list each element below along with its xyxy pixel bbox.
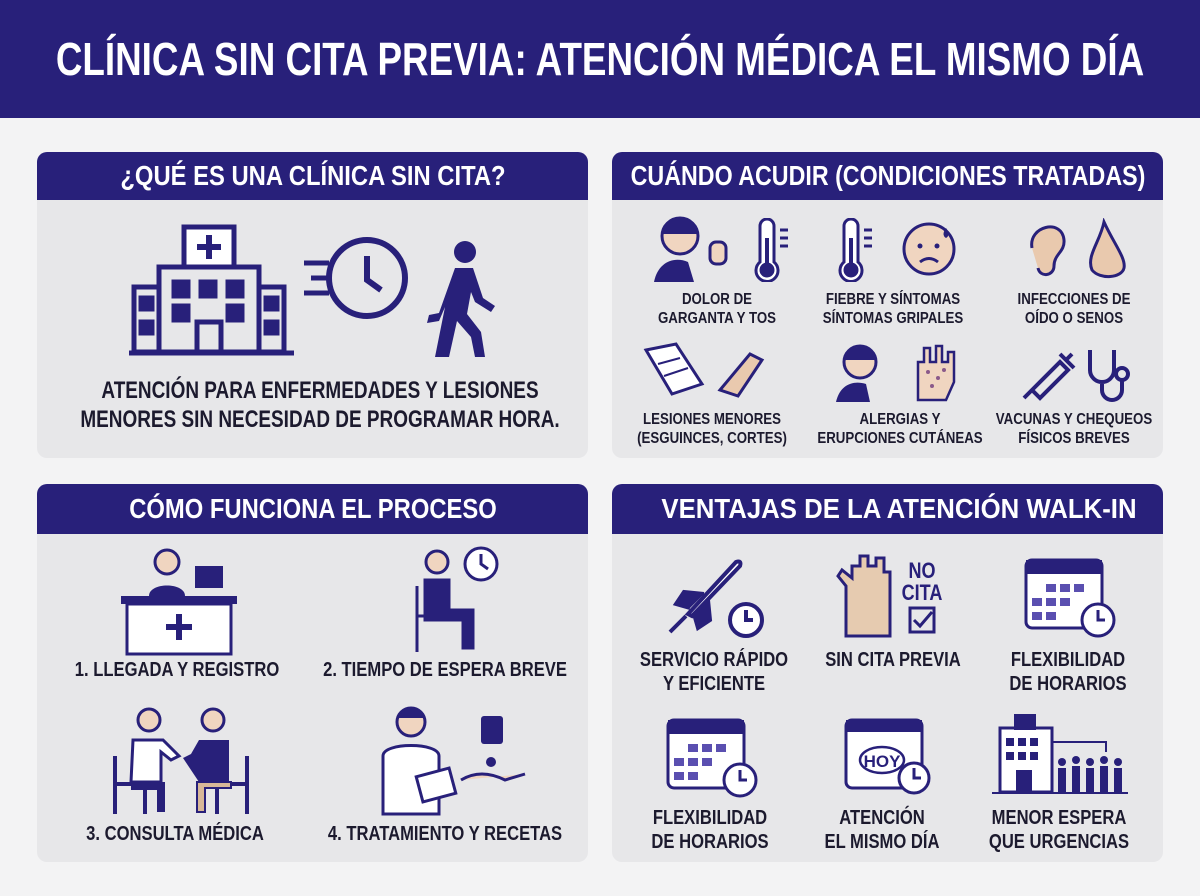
icon: sick face (902, 222, 956, 276)
heading: conditions: CUÁNDO ACUDIR (CONDICIONES TRATADAS) (630, 160, 1145, 191)
text: description: ATENCIÓN PARA ENFERMEDADES Y LESIONES (101, 377, 539, 404)
icon: ear and nose (1030, 218, 1126, 278)
label: no appointment: SIN CITA PREVIA (825, 649, 961, 671)
label: less wait than ER: MENOR ESPERA (992, 807, 1126, 829)
label: less wait than ER: QUE URGENCIAS (989, 831, 1129, 853)
label: sore throat: GARGANTA Y TOS (658, 310, 776, 327)
label: fast service (640, 648, 788, 695)
heading: what is: ¿QUÉ ES UNA CLÍNICA SIN CITA? (120, 160, 505, 191)
panel: what is (37, 152, 588, 458)
icon: doctor and prescription (382, 706, 526, 816)
text: description (80, 376, 560, 433)
heading: what is (37, 152, 588, 200)
label: step 1: 1. LLEGADA Y REGISTRO (75, 659, 279, 681)
label: vaccines: VACUNAS Y CHEQUEOS (996, 411, 1152, 428)
icon: hand no appointment: NO (908, 559, 936, 583)
label: allergies: ERUPCIONES CUTÁNEAS (817, 430, 983, 447)
label: flexible hours 2 (651, 807, 769, 853)
label: minor injuries: LESIONES MENORES (643, 411, 781, 428)
label: fast service: SERVICIO RÁPIDO (640, 649, 788, 671)
label: less wait than ER (989, 807, 1129, 853)
heading: advantages (612, 484, 1163, 534)
label: flexible hours 2: DE HORARIOS (651, 831, 769, 853)
icon: rocket with clock (668, 560, 764, 638)
icon: thermometer 2 (838, 218, 872, 282)
label: minor injuries: (ESGUINCES, CORTES) (637, 430, 787, 447)
icon: hand no appointment (836, 554, 942, 638)
heading: conditions (612, 152, 1163, 200)
icon: calendar today (844, 718, 930, 794)
heading: process: CÓMO FUNCIONA EL PROCESO (129, 493, 496, 524)
label: minor injuries (637, 411, 787, 447)
label: step 3: 3. CONSULTA MÉDICA (86, 823, 264, 845)
panel: advantages (612, 484, 1163, 862)
icon: coughing person (654, 216, 728, 282)
label: fever (823, 290, 963, 327)
heading: advantages: VENTAJAS DE LA ATENCIÓN WALK-IN (661, 493, 1136, 524)
icon: fast clock (304, 237, 408, 319)
label: fever: FIEBRE Y SÍNTOMAS (826, 291, 960, 308)
panel: conditions (612, 152, 1163, 458)
panel: process (37, 484, 588, 862)
icon: consultation (113, 708, 249, 814)
icon: bandaged arm (644, 342, 764, 398)
icon: syringe and stethoscope (1022, 350, 1130, 402)
icon: reception desk (121, 548, 237, 656)
icon: waiting person with clock (416, 546, 498, 652)
label: fast service: Y EFICIENTE (663, 673, 765, 695)
label: flexible hours: FLEXIBILIDAD (1011, 649, 1125, 671)
label: ear infections (1018, 291, 1130, 327)
icon: sneezing person and rash hand (836, 344, 956, 402)
icon: hospital with queue (992, 714, 1128, 794)
icon: calendar today: HOY (864, 752, 901, 771)
title (0, 0, 1200, 118)
label: sore throat: DOLOR DE (682, 291, 752, 308)
label: ear infections: INFECCIONES DE (1018, 291, 1130, 308)
label: same day: ATENCIÓN (839, 807, 925, 829)
label: same day (825, 806, 939, 853)
label: flexible hours: DE HORARIOS (1009, 673, 1127, 695)
label: vaccines (996, 411, 1152, 447)
label: vaccines: FÍSICOS BREVES (1018, 430, 1130, 447)
label: allergies: ALERGIAS Y (860, 411, 940, 428)
icon: hand no appointment: CITA (902, 581, 942, 605)
label: fever: SÍNTOMAS GRIPALES (823, 310, 963, 327)
label: ear infections: OÍDO O SENOS (1025, 310, 1123, 327)
label: same day: EL MISMO DÍA (825, 831, 939, 853)
text: description: MENORES SIN NECESIDAD DE PROGRAMAR HORA. (80, 406, 560, 433)
label: allergies (817, 411, 983, 447)
title: CLÍNICA SIN CITA PREVIA: ATENCIÓN MÉDICA EL MISMO DÍA (56, 33, 1144, 85)
icon: walking person (427, 241, 495, 357)
icon: hospital (129, 224, 294, 356)
icon: thermometer (754, 218, 788, 282)
icon: calendar clock 2 (666, 718, 758, 798)
label: sore throat (658, 291, 776, 327)
label: step 2: 2. TIEMPO DE ESPERA BREVE (323, 659, 567, 681)
label: flexible hours 2: FLEXIBILIDAD (653, 807, 767, 829)
icon: calendar clock (1024, 558, 1116, 638)
label: step 4: 4. TRATAMIENTO Y RECETAS (328, 823, 562, 845)
heading: process (37, 484, 588, 534)
label: flexible hours (1009, 649, 1127, 695)
